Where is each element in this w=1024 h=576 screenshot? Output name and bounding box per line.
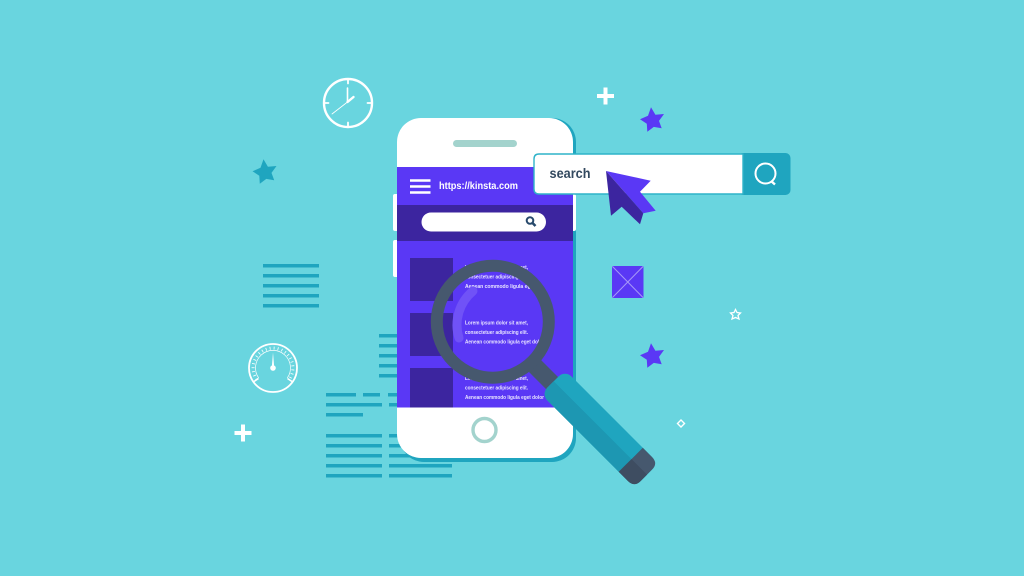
icon: white outline star bbox=[730, 310, 740, 319]
icon: clock bbox=[324, 79, 372, 127]
phone speaker bbox=[453, 140, 517, 147]
url: https://kinsta.com bbox=[439, 181, 518, 192]
icon: envelope square bbox=[612, 266, 644, 298]
icon: purple star top bbox=[640, 107, 664, 132]
dark search band bbox=[397, 205, 573, 241]
phone right side button bbox=[570, 194, 576, 231]
phone body bbox=[397, 118, 573, 458]
result text: consectetuer adipiscing elit. bbox=[465, 274, 529, 280]
result text: consectetuer adipiscing elit. bbox=[465, 330, 529, 336]
home button bbox=[473, 418, 496, 442]
phone screen bbox=[397, 167, 573, 408]
icon: gauge bbox=[249, 344, 297, 392]
result text: Lorem ipsum dolor sit amet, bbox=[465, 320, 529, 326]
search word: search bbox=[550, 166, 590, 181]
text lines: behind phone bbox=[326, 334, 452, 478]
search button bbox=[738, 153, 790, 195]
phone left side buttons bbox=[393, 194, 401, 277]
address bar bbox=[410, 180, 518, 192]
result text: Aenean commodo ligula eget dolor bbox=[465, 340, 544, 346]
handle neck bbox=[535, 366, 557, 388]
result text: consectetuer adipiscing elit. bbox=[465, 386, 529, 392]
magnifier glyph bbox=[527, 217, 536, 226]
icon: teal star bbox=[252, 159, 276, 184]
icon: plus lower left bbox=[234, 424, 252, 442]
hamburger icon bbox=[410, 180, 430, 192]
result text: Aenean commodo ligula eget bbox=[465, 284, 535, 290]
result text: Lorem ipsum dolor sit amet, bbox=[465, 376, 529, 382]
search field bbox=[534, 154, 743, 194]
search box bbox=[534, 153, 790, 195]
result text: Aenean commodo ligula eget dolor bbox=[465, 395, 544, 401]
search button icon bbox=[756, 164, 776, 184]
result thumbnails bbox=[410, 258, 453, 408]
handle bbox=[541, 370, 658, 487]
text lines: upper left bbox=[263, 264, 319, 308]
lens ring bbox=[437, 266, 549, 378]
cursor arrow bbox=[606, 171, 656, 224]
phone search field bbox=[422, 212, 546, 232]
magnifying glass bbox=[437, 266, 658, 487]
result text bbox=[465, 265, 544, 401]
icon: plus upper right bbox=[597, 88, 614, 104]
phone shadow bbox=[400, 118, 576, 462]
lens glare bbox=[457, 291, 473, 338]
result text: Lorem ipsum dolor sit amet, bbox=[465, 265, 529, 271]
phone bbox=[393, 118, 576, 462]
icon: white diamond bbox=[678, 420, 684, 427]
icon: purple star lower bbox=[640, 343, 664, 368]
